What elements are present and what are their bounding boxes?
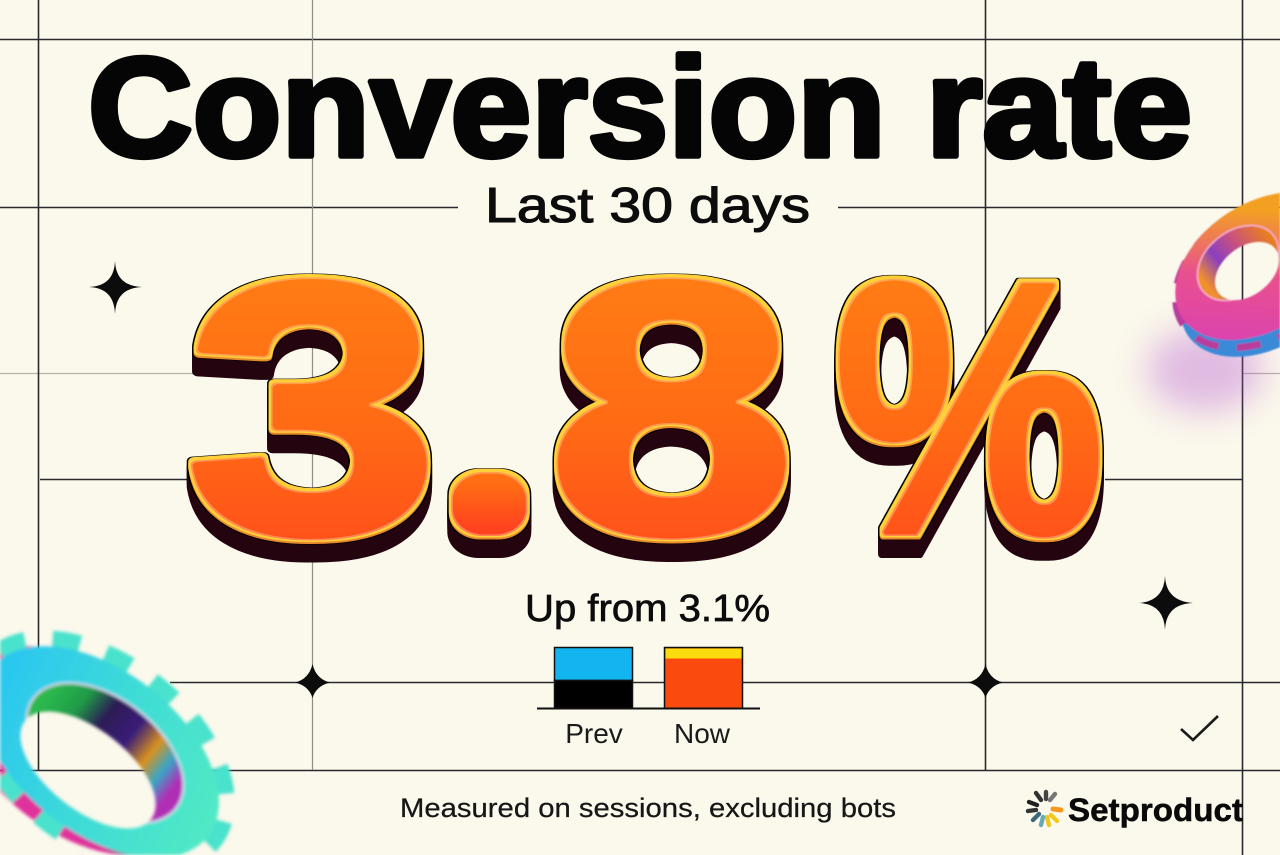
label: now: Now bbox=[674, 718, 731, 749]
icon: teal gear bbox=[0, 604, 230, 855]
gear teeth bbox=[0, 641, 224, 844]
chart baseline bbox=[537, 708, 760, 710]
gear side bbox=[1171, 232, 1280, 358]
icon: diamond left bbox=[295, 664, 330, 698]
title: Conversion rate bbox=[88, 28, 1192, 186]
subtitle: Last 30 days bbox=[485, 179, 810, 233]
gear bore bbox=[1196, 224, 1280, 302]
comparison text: Up from 3.1% bbox=[525, 588, 770, 630]
label: prev: Prev bbox=[565, 718, 623, 749]
gear bore bbox=[22, 679, 187, 826]
footnote: Measured on sessions, excluding bots bbox=[400, 793, 896, 823]
bar: previous bbox=[554, 648, 632, 708]
percent sign: % bbox=[834, 209, 1105, 609]
icon: pink gear bbox=[1171, 192, 1280, 358]
icon: diamond right bbox=[968, 664, 1003, 698]
decimal point: . bbox=[476, 438, 503, 527]
bar chart bbox=[537, 648, 760, 749]
wordmark: Setproduct bbox=[1068, 792, 1243, 828]
digit 8: 8 bbox=[548, 209, 795, 608]
icon: check mark bbox=[1181, 716, 1218, 740]
digit 3: 3 bbox=[186, 208, 439, 608]
icon: sparkle left bbox=[89, 261, 142, 314]
gear shadow bbox=[1147, 328, 1263, 412]
headline number bbox=[186, 208, 1105, 609]
icon: sparkle right bbox=[1139, 576, 1193, 630]
bar: now bbox=[664, 648, 742, 708]
gear face bbox=[1174, 192, 1280, 342]
gear side bbox=[0, 644, 130, 855]
logo bbox=[1028, 792, 1243, 828]
gear face bbox=[0, 646, 219, 855]
logo mark bbox=[1028, 792, 1061, 825]
